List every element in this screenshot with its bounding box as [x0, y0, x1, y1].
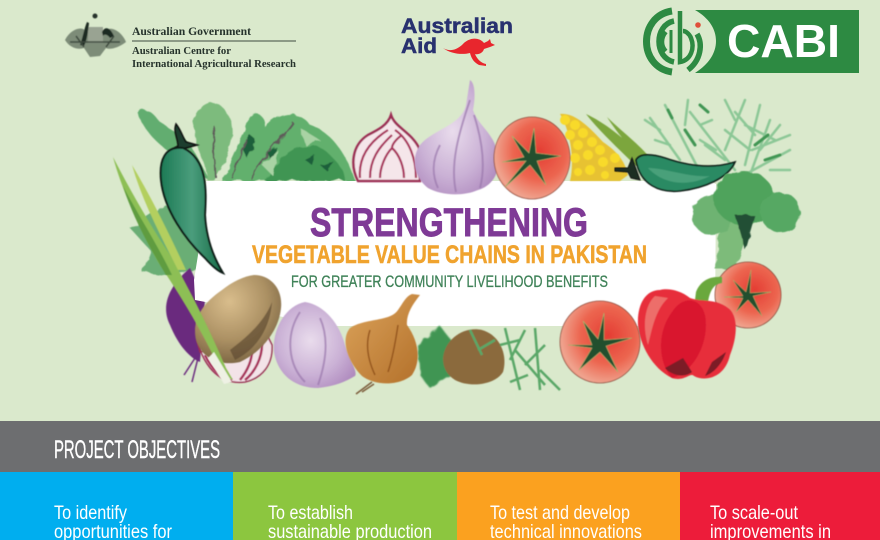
illustration: lower garlic	[274, 302, 356, 388]
text: Australian Government: Australian Government	[132, 24, 251, 38]
panel: project objectives header	[0, 421, 880, 472]
text: Australian Centre for: Australian Centre for	[132, 46, 231, 57]
icon: red kangaroo	[443, 39, 495, 66]
text: objective 2	[268, 502, 432, 540]
illustration: brown onion	[346, 294, 420, 394]
illustration: tomato top	[494, 117, 570, 199]
illustration: red bell pepper	[638, 277, 736, 379]
illustration: tomato right	[715, 262, 781, 328]
illustration: green chilli right	[615, 155, 735, 191]
panel: objective 3	[457, 472, 680, 540]
text: Aid: Aid	[401, 35, 437, 58]
text: objective 3: To test and develop	[490, 502, 630, 524]
panel: objective 2	[233, 472, 457, 540]
logo: Australian Government ACIAR	[65, 14, 296, 70]
subheading: community livelihood benefits: FOR GREATER COMMUNITY LIVELIHOOD BENEFITS	[291, 272, 608, 291]
heading: vegetable value chains in Pakistan: VEGETABLE VALUE CHAINS IN PAKISTAN	[252, 241, 647, 269]
illustration: large potato	[195, 275, 281, 363]
logo: CABI	[646, 10, 859, 73]
text: objective 2: To establish	[268, 502, 353, 524]
illustration: green chilli left	[161, 124, 223, 273]
illustration: tomato bottom	[560, 301, 640, 383]
illustration: white banner panel	[194, 181, 716, 326]
text: CABI: CABI	[727, 15, 840, 67]
illustration: red onion top	[353, 115, 420, 181]
illustration: corn leaves	[586, 114, 650, 166]
illustration: spring onions	[113, 157, 233, 384]
illustration: dill sprigs top right	[645, 100, 790, 180]
illustration: yellow corn	[560, 114, 628, 181]
icon: coat of arms crest	[65, 14, 126, 57]
text: objective 4: To scale-out	[710, 502, 798, 524]
logo: Australian Aid	[401, 15, 513, 66]
illustration: red onion bottom	[197, 337, 272, 382]
heading: project objectives: PROJECT OBJECTIVES	[54, 436, 220, 464]
illustration: large garlic top	[415, 80, 499, 194]
heading: STRENGTHENING: STRENGTHENING	[310, 201, 588, 245]
text: objective 4	[710, 502, 831, 540]
illustration: dill and small potato bottom	[418, 326, 560, 390]
icon: CABI roundel	[646, 11, 701, 72]
panel: objective 1	[0, 472, 233, 540]
illustration: back leaves left	[130, 205, 200, 275]
panel: objective 4	[680, 472, 880, 540]
text: objective 1: To identify	[54, 502, 127, 524]
illustration: broccoli	[692, 171, 800, 270]
text: International Agricultural Research: International Agricultural Research	[132, 59, 296, 70]
text: objective 3	[490, 502, 642, 540]
page background	[0, 0, 880, 421]
illustration: purple beet	[166, 268, 205, 382]
green plate	[695, 10, 859, 73]
illustration: leafy greens behind the banner	[137, 102, 355, 181]
text: Australian: Australian	[401, 15, 513, 38]
text: objective 1	[54, 502, 172, 540]
